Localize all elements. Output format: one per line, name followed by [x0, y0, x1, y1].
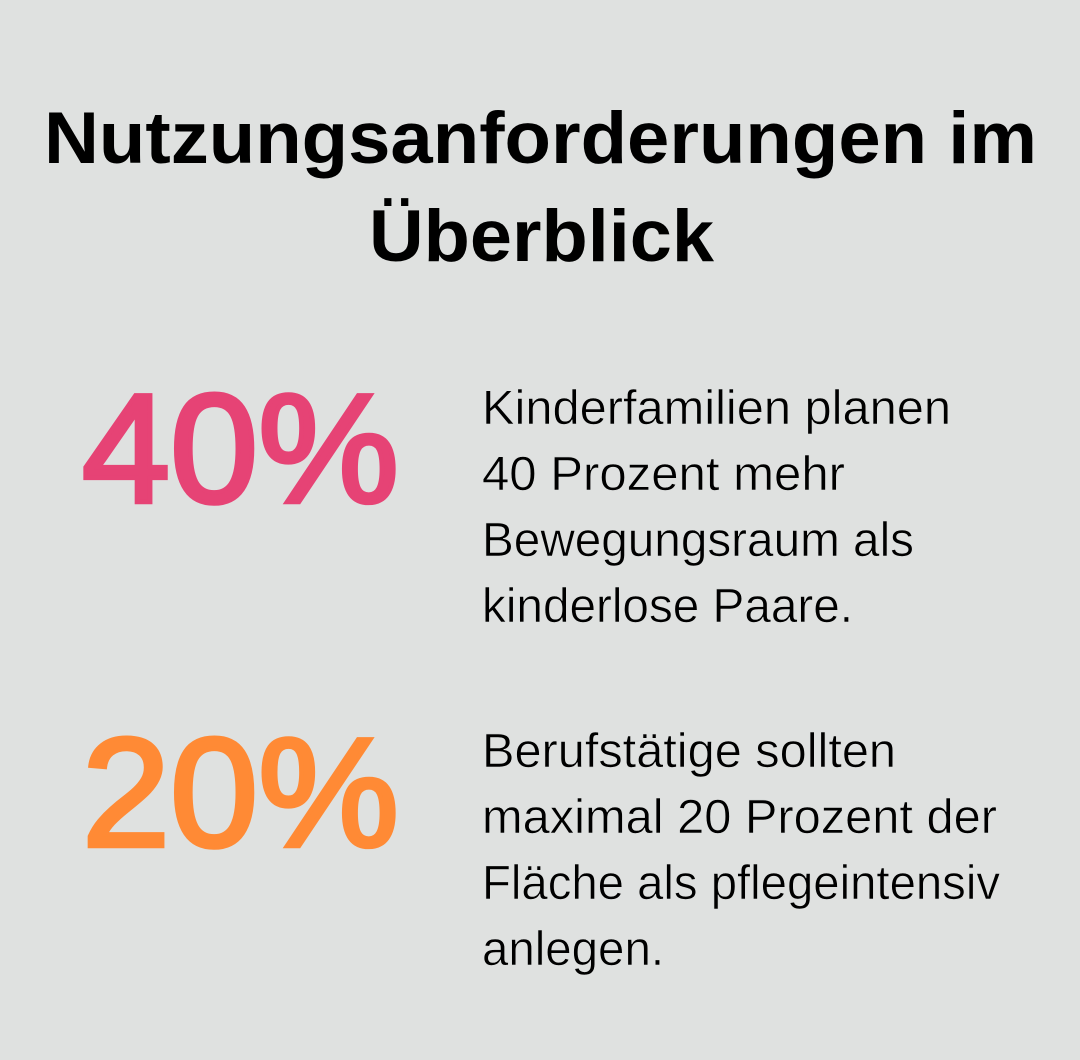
text: Kinderfamilien: kinderlose Paare. [482, 580, 853, 633]
text: Berufstätige [482, 725, 1000, 976]
text: Berufstätige: maximal 20 Prozent der [482, 791, 997, 844]
stat: 20% [82, 706, 1000, 976]
text: Kinderfamilien [482, 382, 951, 633]
title: Überblick [369, 196, 714, 277]
title: Nutzungsanforderungen im [44, 98, 1037, 179]
text: Kinderfamilien: 40 Prozent mehr [482, 448, 845, 501]
text: Berufstätige: anlegen. [482, 923, 664, 976]
number: 40 percent: 40% [82, 362, 399, 535]
text: Kinderfamilien: Kinderfamilien planen [482, 382, 951, 435]
title [44, 98, 1037, 277]
text: Berufstätige: Fläche als pflegeintensiv [482, 857, 1000, 910]
number: 20 percent: 20% [82, 706, 399, 879]
text: Berufstätige: Berufstätige sollten [482, 725, 896, 778]
text: Kinderfamilien: Bewegungsraum als [482, 514, 914, 567]
stat: 40% [82, 362, 951, 633]
